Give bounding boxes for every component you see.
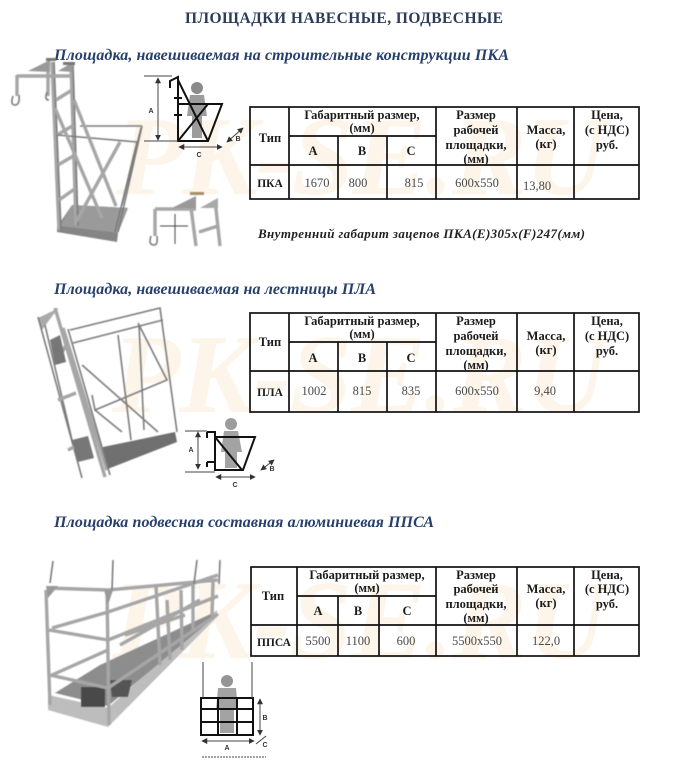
table: ПЛА: Габаритный размер, [304,314,420,328]
table: ППСА: (кг) [535,596,557,610]
table: ППСА: 122,0 [532,634,560,648]
table: ПЛА [250,313,639,412]
table: ПЛА: Размер [456,314,496,328]
photo: ППСА platform [46,560,220,727]
table: ПКА: руб. [596,138,618,152]
diagram: ППСА dimensions: C [262,742,268,749]
table: ПЛА: (кг) [535,343,557,357]
heading: ППСА: Площадка подвесная составная алюминиевая ППСА [53,514,434,531]
table: ПЛА: Цена, [591,314,623,328]
diagram: ППСА dimensions: B [262,715,268,722]
watermark: middle: PK-SE.RU [111,313,612,437]
table: ПКА: 600x550 [455,176,499,190]
table: ПЛА: A [308,351,318,365]
table: ПЛА: руб. [596,344,618,358]
diagram: ПКА side dimensions [144,76,243,159]
diagram: ПЛА dimensions: C [232,482,238,489]
watermark: top: PK-SE.RU [115,95,611,219]
diagram: ПКА side dimensions: A [148,108,154,115]
table: ППСА: площадки, [445,597,507,611]
table: ППСА: C [402,604,412,618]
diagram: ПКА side dimensions: C [196,152,202,159]
table: ПЛА: Масса, [527,329,565,343]
diagram: ПКА side dimensions: B [235,136,241,143]
table: ПЛА: 600x550 [455,384,499,398]
table: ППСА: 5500x550 [452,634,502,648]
diagram: ППСА dimensions: A [224,745,230,752]
table: ППСА: Габаритный размер, [309,568,425,582]
table: ПЛА: ПЛА [257,387,284,399]
table: ПКА: (мм) [349,121,375,135]
table: ПКА: Размер [456,108,496,122]
table: ППСА: Тип [262,589,284,603]
table: ПКА: 1670 [304,176,330,190]
diagram: ПЛА dimensions: A [188,447,194,454]
table: ППСА: 600 [397,634,415,648]
table: ПЛА: Тип [259,335,281,349]
table: ППСА: Цена, [591,568,623,582]
heading: ПЛА: Площадка, навешиваемая на лестницы ПЛА [53,281,376,298]
title: ПЛОЩАДКИ НАВЕСНЫЕ, ПОДВЕСНЫЕ [185,10,503,27]
table: ППСА: (мм) [354,581,380,595]
table: ПЛА: 835 [402,384,420,398]
table: ПКА: 800 [349,176,367,190]
table: ППСА: рабочей [453,582,499,596]
note: hook dimensions: Внутренний габарит зацепов ПКА(E)305x(F)247(мм) [257,226,585,241]
table: ПКА: Тип [259,131,281,145]
table: ПКА [250,107,639,199]
table: ППСА: 1100 [346,634,370,648]
photo: ПКА platform [12,58,142,242]
watermark: bottom: PK-SE.RU [111,559,612,683]
table: ПКА: ПКА [257,178,283,190]
table: ПКА: площадки, [445,138,507,152]
diagram: ПКА hooks detail [150,192,220,246]
table: ПЛА: (мм) [463,358,489,372]
table: ППСА: B [354,604,362,618]
table: ПКА: A [308,144,318,158]
table: ПЛА: 1002 [302,384,326,398]
table: ППСА: 5500 [306,634,330,648]
table: ПЛА: (мм) [349,327,375,341]
table: ППСА: руб. [596,597,618,611]
table: ПКА: C [406,144,416,158]
table: ППСА [251,567,639,656]
table: ППСА: (с НДС) [585,582,629,596]
table: ПКА: 13,80 [523,179,551,193]
table: ПКА: Габаритный размер, [304,108,420,122]
table: ПКА: (кг) [535,137,557,151]
table: ПКА: B [358,144,366,158]
diagram: ПЛА dimensions [185,418,275,489]
table: ПЛА: B [358,351,366,365]
table: ПЛА: (с НДС) [585,329,629,343]
table: ПЛА: 9,40 [534,384,556,398]
table: ППСА: ППСА [257,637,292,649]
table: ПКА: (мм) [463,152,489,166]
table: ПЛА: рабочей [453,329,499,343]
table: ППСА: Масса, [527,582,565,596]
diagram: ППСА dimensions [201,662,268,757]
table: ПКА: Цена, [591,108,623,122]
table: ППСА: Размер [456,568,496,582]
table: ПЛА: 815 [353,384,371,398]
table: ПКА: (с НДС) [585,123,629,137]
table: ПКА: 815 [405,176,423,190]
photo: ПЛА platform [38,308,177,478]
diagram: ПЛА dimensions: B [269,466,275,473]
table: ПКА: Масса, [527,123,565,137]
table: ППСА: (мм) [463,611,489,625]
heading: ПКА: Площадка, навешиваемая на строительные конструкции ПКА [53,47,509,64]
table: ПЛА: C [406,351,416,365]
table: ППСА: A [313,604,323,618]
table: ПЛА: площадки, [445,344,507,358]
table: ПКА: рабочей [453,123,499,137]
